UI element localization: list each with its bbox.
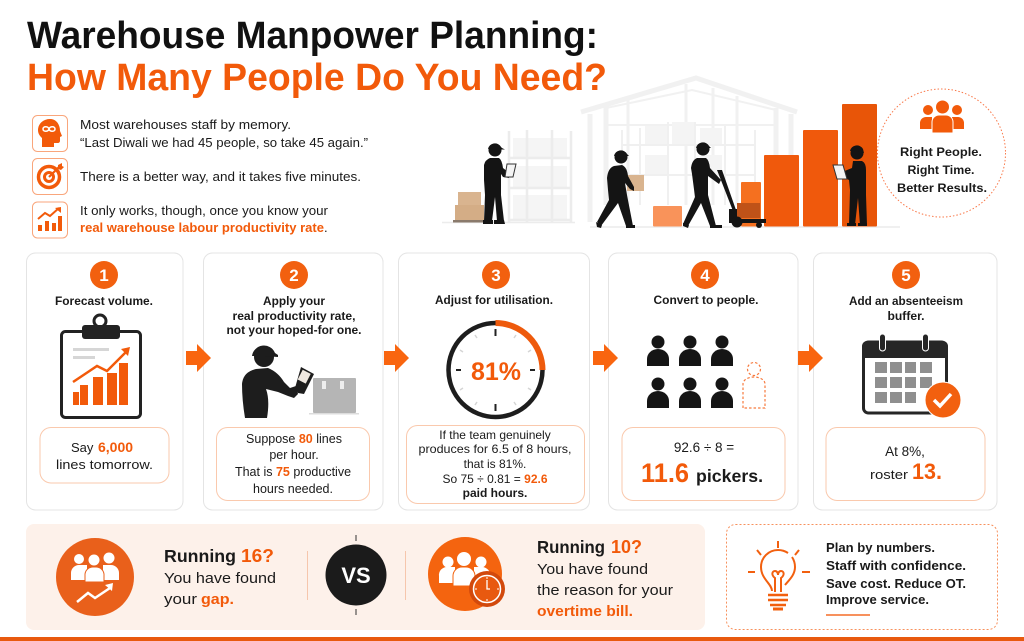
text: tagline: Better Results. xyxy=(897,181,987,195)
callout box: At 8%, xyxy=(885,444,925,459)
text: running 10: overtime bill. xyxy=(537,603,633,620)
number badge 3 xyxy=(482,261,510,289)
heading xyxy=(226,296,362,337)
callout box xyxy=(40,428,169,483)
number badge 1: 1 xyxy=(99,266,109,285)
callout box: 6,000 xyxy=(98,439,133,455)
icon: people with clock xyxy=(428,537,505,611)
icon: worker scanning box xyxy=(242,346,359,418)
callout box: produces for 6.5 of 8 hours, xyxy=(418,442,572,456)
text: running 16: gap. xyxy=(201,591,234,608)
callout box xyxy=(406,426,584,504)
heading: Forecast volume. xyxy=(55,296,153,308)
number badge 5: 5 xyxy=(901,266,911,285)
text: productivity rate: It only works, though, once you know your xyxy=(80,203,329,218)
callout box xyxy=(826,428,985,500)
worker with pallet jack xyxy=(683,142,766,228)
illustration: warehouse with workers and rising bars xyxy=(442,78,900,228)
callout box: 11.6 xyxy=(641,458,689,488)
panel: plan by numbers xyxy=(726,524,998,630)
callout box xyxy=(622,428,785,500)
text: running 16: Running xyxy=(164,546,236,566)
text: staff by memory: “Last Diwali we had 45 people, so take 45 again.” xyxy=(80,135,368,150)
number badge 4 xyxy=(691,261,719,289)
text: productivity rate xyxy=(80,203,329,235)
heading xyxy=(849,296,963,323)
text: running 10 xyxy=(537,537,673,620)
text: staff by memory: Most warehouses staff by memory. xyxy=(80,117,291,132)
heading: Apply your xyxy=(263,296,326,308)
panel: step 4 convert xyxy=(608,253,798,510)
text: running 16 xyxy=(164,546,276,608)
footer bar xyxy=(0,637,1024,641)
title xyxy=(27,15,607,99)
callout box: roster xyxy=(870,467,909,482)
worker carrying box xyxy=(596,150,644,228)
text: better way: There is a better way, and it takes five minutes. xyxy=(80,169,361,184)
heading: Convert to people. xyxy=(654,295,758,307)
text: running 16: 16? xyxy=(241,546,274,566)
worker with tablet right xyxy=(833,145,867,226)
icon: clipboard with chart xyxy=(62,315,140,418)
icon: six people and partial person xyxy=(647,336,765,408)
callout box: pickers. xyxy=(696,466,763,486)
callout box: So 75 ÷ 0.81 = 92.6 xyxy=(442,472,548,486)
inner racks xyxy=(622,122,755,205)
panel: step 5 absenteeism xyxy=(814,253,997,510)
text: running 16: your xyxy=(164,591,197,608)
number badge 1 xyxy=(90,261,118,289)
panel: running 16 vs running 10 xyxy=(26,524,705,630)
callout box: That is 75 productive xyxy=(235,465,351,479)
accent underline xyxy=(826,614,870,616)
storage rack left xyxy=(509,130,571,222)
cardboard boxes xyxy=(453,192,486,222)
heading: not your hoped-for one. xyxy=(226,325,362,337)
panel: step 2 productivity xyxy=(204,253,383,510)
badge: VS: VS xyxy=(341,563,371,588)
arrow 2 to 3 xyxy=(384,344,409,372)
text: productivity rate: . xyxy=(324,220,328,235)
icon: calendar with check xyxy=(862,334,961,418)
callout box: Say xyxy=(71,440,94,455)
icon: target xyxy=(32,158,68,194)
icon: people with upward trend xyxy=(56,538,134,616)
callout box: 92.6 ÷ 8 = xyxy=(674,440,734,455)
callout box: paid hours. xyxy=(463,486,527,500)
heading: Adjust for utilisation. xyxy=(435,295,553,307)
text: plan by numbers: Staff with confidence. xyxy=(826,559,966,573)
icon: group of people xyxy=(920,100,964,133)
arrow 3 to 4 xyxy=(593,344,618,372)
callout box: 13. xyxy=(912,459,942,484)
text: tagline xyxy=(897,145,987,195)
worker with tablet left xyxy=(483,143,516,224)
badge: VS xyxy=(326,535,386,615)
text: running 10: 10? xyxy=(611,537,642,557)
callout: right people circle xyxy=(878,89,1006,217)
title: Warehouse Manpower Planning: xyxy=(27,15,598,57)
dividers xyxy=(308,551,406,600)
text: plan by numbers: Improve service. xyxy=(826,593,929,607)
callout box xyxy=(216,428,370,500)
number badge 3: 3 xyxy=(491,266,501,285)
text: tagline: Right People. xyxy=(900,145,982,159)
callout box: hours needed. xyxy=(253,482,333,496)
text: running 10: You have found xyxy=(537,561,648,578)
callout box: If the team genuinely xyxy=(439,428,551,442)
heading: Add an absenteeism xyxy=(849,296,963,308)
text: plan by numbers: Save cost. Reduce OT. xyxy=(826,577,966,591)
callout box: per hour. xyxy=(269,448,319,462)
text: running 10: the reason for your xyxy=(537,582,673,599)
small block bar xyxy=(653,206,682,226)
text: plan by numbers xyxy=(826,541,966,607)
text: plan by numbers: Plan by numbers. xyxy=(826,541,935,555)
number badge 2: 2 xyxy=(289,266,299,285)
heading: real productivity rate, xyxy=(232,311,356,323)
orange bars xyxy=(741,104,877,226)
icon: growth chart xyxy=(32,202,68,238)
intro list xyxy=(32,116,368,238)
heading: buffer. xyxy=(888,311,924,323)
number badge 5 xyxy=(892,261,920,289)
title: How Many People Do You Need? xyxy=(27,57,607,99)
number badge 2 xyxy=(280,261,308,289)
chart: 81% clock gauge: 81% xyxy=(471,358,521,386)
chart: 81% clock gauge xyxy=(448,323,542,417)
panel: step 3 utilisation xyxy=(398,253,590,510)
text: running 16: You have found xyxy=(164,570,276,587)
text: productivity rate: real warehouse labour productivity rate xyxy=(80,220,324,235)
arrow 4 to 5 xyxy=(798,344,823,372)
floor lines xyxy=(442,222,900,227)
number badge 4: 4 xyxy=(700,266,710,285)
text: tagline: Right Time. xyxy=(908,163,974,177)
arrow 1 to 2 xyxy=(186,344,211,372)
callout box: that is 81%. xyxy=(464,457,526,471)
icon: head with memory loop xyxy=(32,116,68,152)
callout box: lines tomorrow. xyxy=(56,457,153,472)
text: staff by memory xyxy=(80,117,368,150)
callout box: Suppose 80 lines xyxy=(246,432,342,446)
panel: step 1 forecast xyxy=(26,253,183,510)
text: running 10: Running xyxy=(537,537,605,557)
warehouse frame xyxy=(581,78,797,222)
icon: light bulb xyxy=(748,541,810,609)
